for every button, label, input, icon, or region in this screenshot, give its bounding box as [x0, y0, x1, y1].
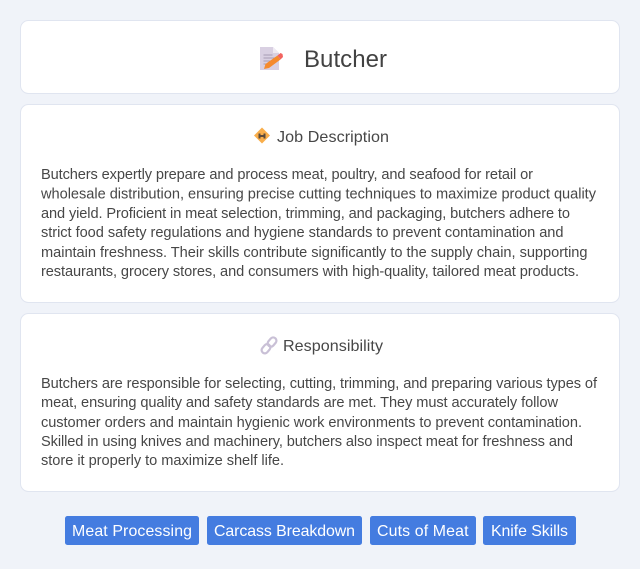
tag: meat processing — [65, 516, 199, 545]
tag: knife skills: Knife Skills — [491, 523, 568, 540]
tag: knife skills — [483, 516, 576, 545]
panel: job description — [20, 104, 620, 302]
responsibility text: Skilled in using knives and machinery, butchers also inspect meat for freshness and — [41, 434, 573, 450]
panel: responsibility — [20, 314, 620, 492]
tag: cuts of meat — [370, 516, 476, 545]
job description text: and yield. Proficient in meat selection, trimming, and packaging, butchers adhere to — [41, 206, 570, 222]
responsibility text — [41, 376, 598, 469]
tags row — [65, 516, 576, 545]
job description text: Butchers expertly prepare and process meat, poultry, and seafood for retail or — [41, 167, 533, 183]
icon: document with pencil — [260, 47, 283, 70]
heading: job description: Job Description — [277, 128, 389, 146]
job description text: strict food safety regulations and hygiene standards to prevent contamination and — [41, 225, 564, 241]
tag: meat processing: Meat Processing — [72, 523, 192, 540]
tag: cuts of meat: Cuts of Meat — [377, 523, 469, 540]
icon: chain link — [260, 336, 278, 355]
job description text — [40, 167, 597, 280]
heading: responsibility: Responsibility — [283, 337, 384, 355]
responsibility text: store it properly to maximize shelf life. — [41, 453, 284, 469]
title: Butcher — [304, 46, 387, 73]
job description text: maintain freshness. Their skills contribute significantly to the supply chain, supporting — [41, 245, 588, 261]
tag: carcass breakdown — [207, 516, 362, 545]
job description text: wholesale distribution, ensuring precise cutting techniques to maximize product quality — [40, 186, 597, 202]
panel: title header — [20, 20, 620, 94]
icon: diamond road sign — [254, 128, 270, 144]
responsibility text: customer orders and maintain hygienic work environments to prevent contamination. — [41, 415, 582, 431]
responsibility text: Butchers are responsible for selecting, cutting, trimming, and preparing various types of — [41, 376, 598, 392]
tag: carcass breakdown: Carcass Breakdown — [214, 523, 355, 540]
job description text: restaurants, grocery stores, and consumers with high-quality, tailored meat products. — [41, 264, 579, 280]
responsibility text: meat, ensuring quality and safety standards are met. They must accurately follow — [41, 395, 558, 411]
